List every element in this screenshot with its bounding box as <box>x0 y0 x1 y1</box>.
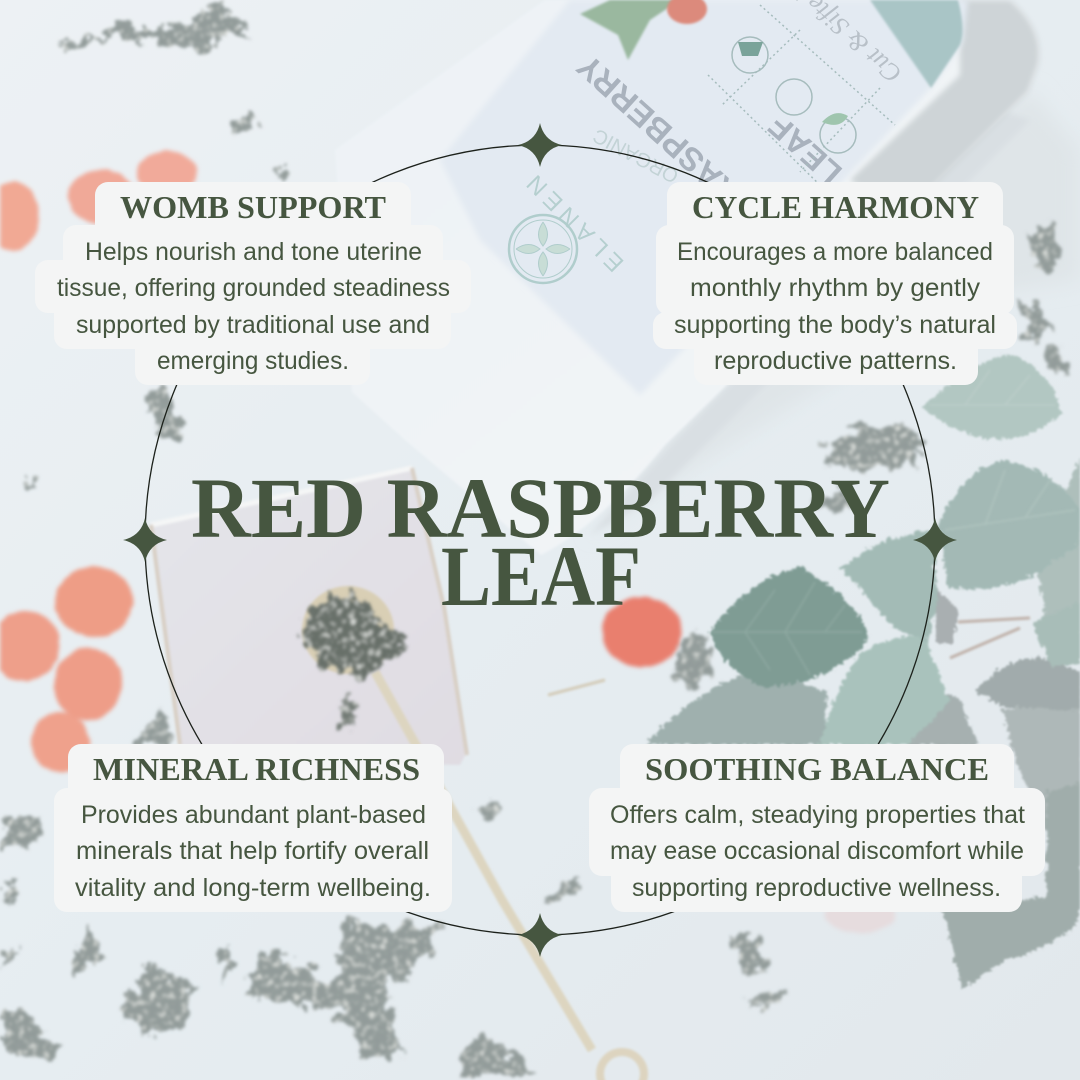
body: cycle harmony: Encourages a more balanced <box>677 238 993 266</box>
body: mineral richness: vitality and long-term wellbeing. <box>75 874 431 902</box>
photo: product pouch: ORGANIC <box>590 124 682 187</box>
photo: raspberry leaves <box>645 352 1080 988</box>
panel background: womb support <box>35 182 471 385</box>
title: LEAF <box>441 528 641 624</box>
body: cycle harmony: monthly rhythm by gently <box>690 274 981 302</box>
photo: leaf veins and stems <box>548 370 1075 695</box>
body: cycle harmony: reproductive patterns. <box>714 347 957 375</box>
panel: cycle harmony <box>653 182 1017 385</box>
panel: mineral richness <box>54 744 452 912</box>
panel: soothing balance <box>589 744 1045 912</box>
circle ring <box>145 145 935 935</box>
body: soothing balance: supporting reproductive wellness. <box>632 874 1001 902</box>
star: bottom <box>518 913 562 957</box>
body: womb support <box>57 238 450 375</box>
body: mineral richness <box>75 801 431 902</box>
star: right <box>913 518 957 562</box>
photo: pouch shadow <box>590 90 1080 535</box>
photo: certification badges <box>708 5 895 195</box>
body: soothing balance <box>610 801 1025 902</box>
body: womb support: emerging studies. <box>157 347 349 375</box>
star: left <box>123 518 167 562</box>
body: mineral richness: minerals that help fortify overall <box>76 837 429 865</box>
photo: golden spoon <box>302 586 644 1080</box>
body: cycle harmony <box>674 238 996 375</box>
photo: product pouch: LEAF <box>761 108 849 192</box>
body: mineral richness: Provides abundant plant-based <box>81 801 426 829</box>
title: RED RASPBERRY <box>191 460 890 556</box>
heading: mineral richness: MINERAL RICHNESS <box>93 751 420 787</box>
heading: cycle harmony: CYCLE HARMONY <box>692 189 979 225</box>
body: soothing balance: Offers calm, steadying properties that <box>610 801 1025 829</box>
panel background: mineral richness <box>54 744 452 912</box>
photo: product pouch <box>335 0 1039 555</box>
panel: womb support <box>35 182 471 385</box>
photo: marble tile <box>151 468 467 765</box>
body: womb support: tissue, offering grounded steadiness <box>57 274 450 302</box>
body: cycle harmony: supporting the body’s natural <box>674 311 996 339</box>
photo: pouch label text: RASPBERRY <box>570 48 747 212</box>
photo: brand logo: ELANEN <box>522 169 629 277</box>
heading: womb support: WOMB SUPPORT <box>120 189 386 225</box>
heading: soothing balance: SOOTHING BALANCE <box>645 751 989 787</box>
star: top <box>518 123 562 167</box>
body: womb support: Helps nourish and tone uterine <box>85 238 422 266</box>
title <box>191 460 890 624</box>
panel background: soothing balance <box>589 744 1045 912</box>
body: womb support: supported by traditional use and <box>76 311 430 339</box>
body: soothing balance: may ease occasional discomfort while <box>610 837 1024 865</box>
photo: raspberries <box>0 151 895 933</box>
panel background: cycle harmony <box>653 182 1017 385</box>
